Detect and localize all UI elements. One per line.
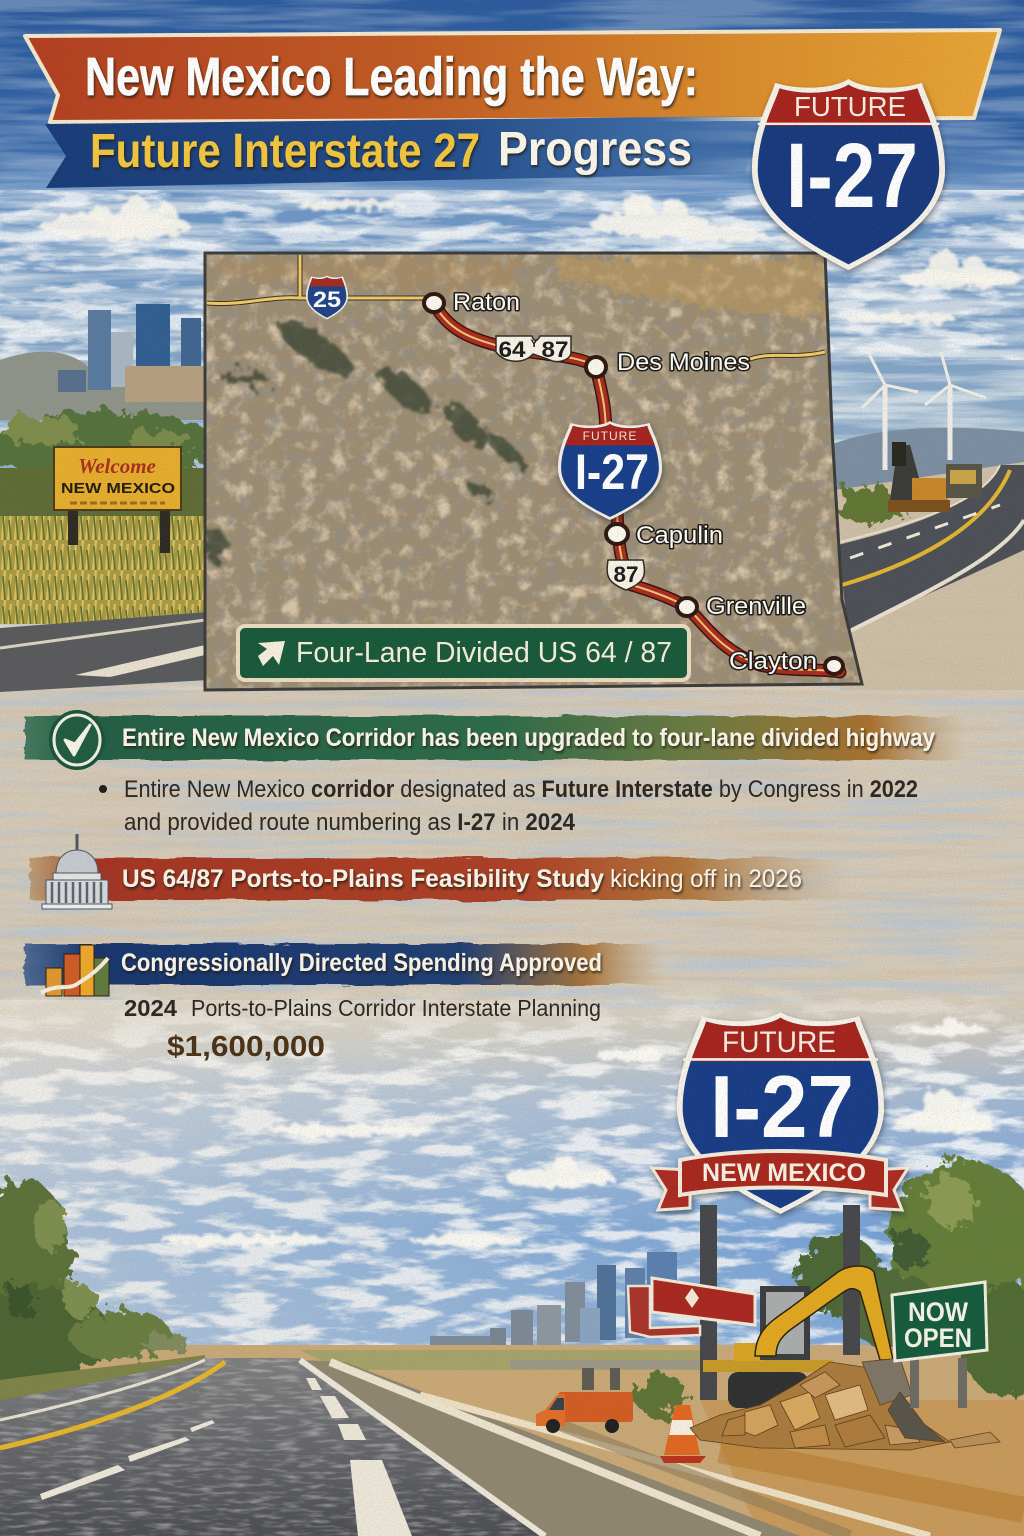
route shields 64 and 87: 64 bbox=[498, 337, 526, 362]
traffic cone bbox=[660, 1405, 706, 1463]
now open sign bbox=[892, 1282, 987, 1361]
spending line item: Ports-to-Plains Corridor Interstate Planning bbox=[191, 995, 601, 1021]
icon: bar chart with arrow bbox=[41, 945, 109, 996]
panel: corridor upgrade bbox=[25, 710, 965, 836]
cloud cluster upper sky bbox=[40, 193, 1020, 324]
shield: future I-27 top right: I-27 bbox=[786, 125, 918, 227]
clouds lower sky bbox=[160, 1016, 995, 1246]
title ribbon orange bbox=[25, 30, 1000, 122]
distant city bottom bbox=[430, 1252, 677, 1348]
band green bbox=[25, 716, 965, 760]
now open sign: NOW bbox=[908, 1297, 968, 1327]
new mexico banner: NEW MEXICO bbox=[702, 1159, 866, 1187]
city labels bbox=[453, 289, 817, 675]
title line two: Future Interstate 27 bbox=[90, 125, 480, 178]
study timing: kicking off in 2026 bbox=[610, 865, 802, 893]
red pennant on posts bbox=[628, 1278, 755, 1337]
I-25 number: 25 bbox=[313, 287, 341, 312]
route shield 87: 87 bbox=[614, 562, 638, 587]
city skyline left bbox=[58, 304, 205, 402]
rock pile bbox=[690, 1358, 1000, 1450]
title ribbon blue bbox=[45, 116, 760, 188]
band navy bbox=[25, 944, 665, 985]
oil pumpjack and truck bbox=[888, 442, 982, 512]
spending heading: Congressionally Directed Spending Approved bbox=[121, 949, 602, 977]
green sign: four-lane divided: Four-Lane Divided US 64 / 87 bbox=[296, 637, 672, 669]
shield: future I-27 New Mexico: I-27 bbox=[710, 1057, 854, 1156]
route shields 64 and 87: Y bbox=[530, 338, 538, 350]
shield: future I-27 New Mexico bbox=[652, 1012, 908, 1214]
bullet text bbox=[99, 776, 918, 836]
map terrain bbox=[200, 250, 870, 695]
spending amount: $1,600,000 bbox=[167, 1031, 325, 1063]
title line one: New Mexico Leading the Way: bbox=[85, 47, 698, 107]
welcome sign bbox=[54, 447, 181, 553]
left landscape scene bbox=[0, 304, 220, 692]
spending line item: 2024 bbox=[124, 995, 177, 1021]
shield: future I-27 on map: FUTURE bbox=[583, 429, 637, 443]
city labels: Raton bbox=[453, 289, 520, 316]
shield: I-25 bbox=[306, 275, 348, 320]
city markers bbox=[424, 294, 843, 674]
city labels: Clayton bbox=[729, 648, 817, 675]
US 64/87 route line bbox=[434, 303, 840, 672]
trees left bbox=[0, 1180, 190, 1385]
bullet text: Entire New Mexico corridor designated as Future Interstate by Congress in 2022 bbox=[124, 776, 918, 803]
shield: future I-27 top right: FUTURE bbox=[794, 91, 906, 122]
sign post pair bbox=[910, 1358, 967, 1408]
welcome sign: NEW MEXICO bbox=[61, 480, 175, 497]
bullet text: and provided route numbering as I-27 in 2024 bbox=[124, 809, 576, 836]
band red bbox=[30, 858, 850, 900]
shield: future I-27 top right bbox=[752, 79, 945, 270]
city labels: Capulin bbox=[636, 522, 723, 549]
welcome sign: Welcome bbox=[78, 454, 156, 478]
bottom landscape scene bbox=[0, 1160, 1024, 1536]
icon: capitol dome bbox=[42, 834, 112, 909]
green sign: four-lane divided bbox=[238, 626, 689, 680]
study heading: US 64/87 Ports-to-Plains Feasibility Study bbox=[122, 865, 604, 893]
wind turbines bbox=[862, 352, 986, 470]
map panel bbox=[200, 250, 870, 695]
ground bbox=[0, 1345, 1024, 1536]
right landscape scene bbox=[830, 352, 1024, 690]
city labels: Des Moines bbox=[617, 349, 750, 376]
corridor heading: Entire New Mexico Corridor has been upgraded to four-lane divided highway bbox=[122, 724, 935, 752]
panel: directed spending bbox=[25, 944, 665, 1063]
highway curve right bbox=[838, 465, 1024, 632]
trees right bbox=[634, 1160, 1024, 1417]
shield: future I-27 on map: I-27 bbox=[575, 444, 649, 500]
excavator bbox=[703, 1266, 893, 1408]
route shields 64 and 87: 87 bbox=[542, 337, 568, 362]
new mexico banner bbox=[652, 1151, 908, 1210]
I-25 yellow road bbox=[207, 255, 825, 361]
title ribbon blue: Progress bbox=[498, 123, 692, 176]
icon: check badge bbox=[49, 710, 105, 770]
shield: future I-27 on map bbox=[558, 421, 662, 520]
posts bbox=[700, 1205, 860, 1400]
route shield 87 bbox=[607, 560, 644, 590]
city labels: Grenville bbox=[706, 593, 806, 620]
shield: future I-27 New Mexico: FUTURE bbox=[722, 1026, 836, 1059]
orange utility truck bbox=[536, 1392, 633, 1433]
highway bottom bbox=[0, 1355, 1024, 1536]
panel: feasibility study bbox=[30, 834, 850, 909]
now open sign: OPEN bbox=[904, 1323, 972, 1353]
route shields 64 and 87 bbox=[496, 336, 571, 362]
overpass bbox=[510, 1360, 700, 1390]
